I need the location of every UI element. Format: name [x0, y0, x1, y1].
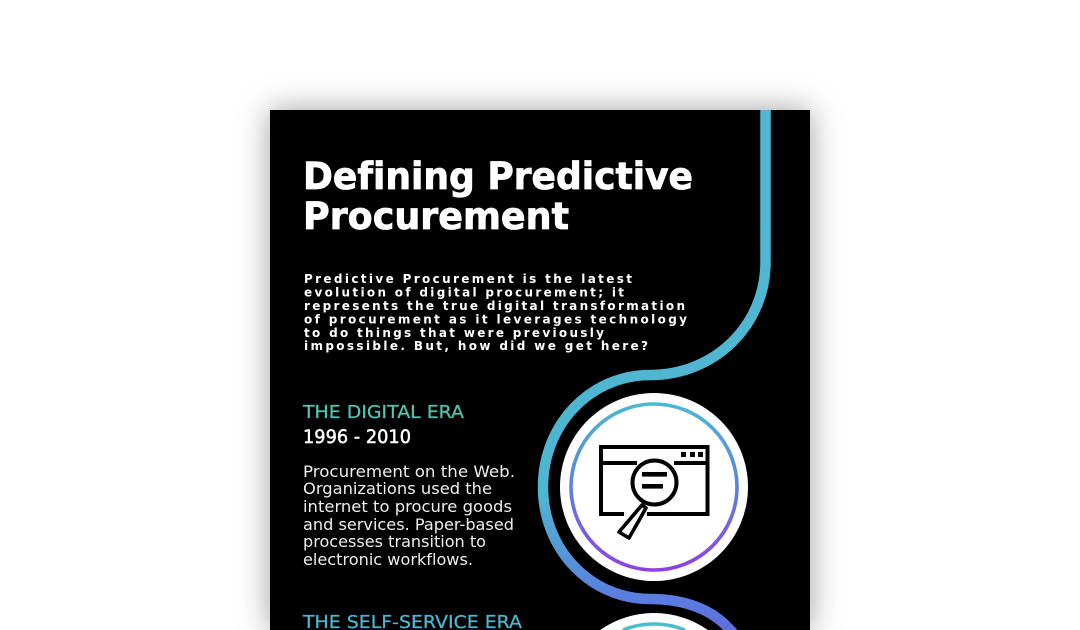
- text block: digital era description: Organizations used the: [303, 479, 492, 498]
- text block: digital era description: and services. Paper-based: [303, 515, 514, 534]
- intro paragraph: to do things that were previously: [304, 326, 604, 340]
- intro paragraph: of procurement as it leverages technology: [304, 312, 687, 326]
- intro paragraph: evolution of digital procurement; it: [304, 286, 624, 300]
- intro paragraph: Predictive Procurement is the latest: [304, 272, 632, 286]
- text block: digital era description: [303, 462, 515, 569]
- date range: 1996 - 2010: 1996 - 2010: [303, 426, 411, 448]
- timeline path: [543, 110, 766, 630]
- heading: the digital era: THE DIGITAL ERA: [302, 402, 465, 423]
- title: [303, 155, 693, 238]
- icon: second era circle: [600, 613, 708, 630]
- title: Procurement: [303, 195, 569, 238]
- icon: browser window with magnifier in ringed circle: [560, 393, 748, 581]
- intro paragraph: represents the true digital transformation: [304, 299, 685, 313]
- text block: digital era description: electronic workflows.: [303, 550, 473, 569]
- panel: black infographic sheet: [270, 110, 810, 630]
- text block: digital era description: Procurement on the Web.: [303, 462, 515, 481]
- text block: digital era description: internet to procure goods: [303, 497, 512, 516]
- text block: digital era description: processes transition to: [303, 532, 486, 551]
- intro paragraph: [304, 272, 687, 353]
- intro paragraph: impossible. But, how did we get here?: [304, 339, 648, 353]
- title: Defining Predictive: [303, 155, 693, 198]
